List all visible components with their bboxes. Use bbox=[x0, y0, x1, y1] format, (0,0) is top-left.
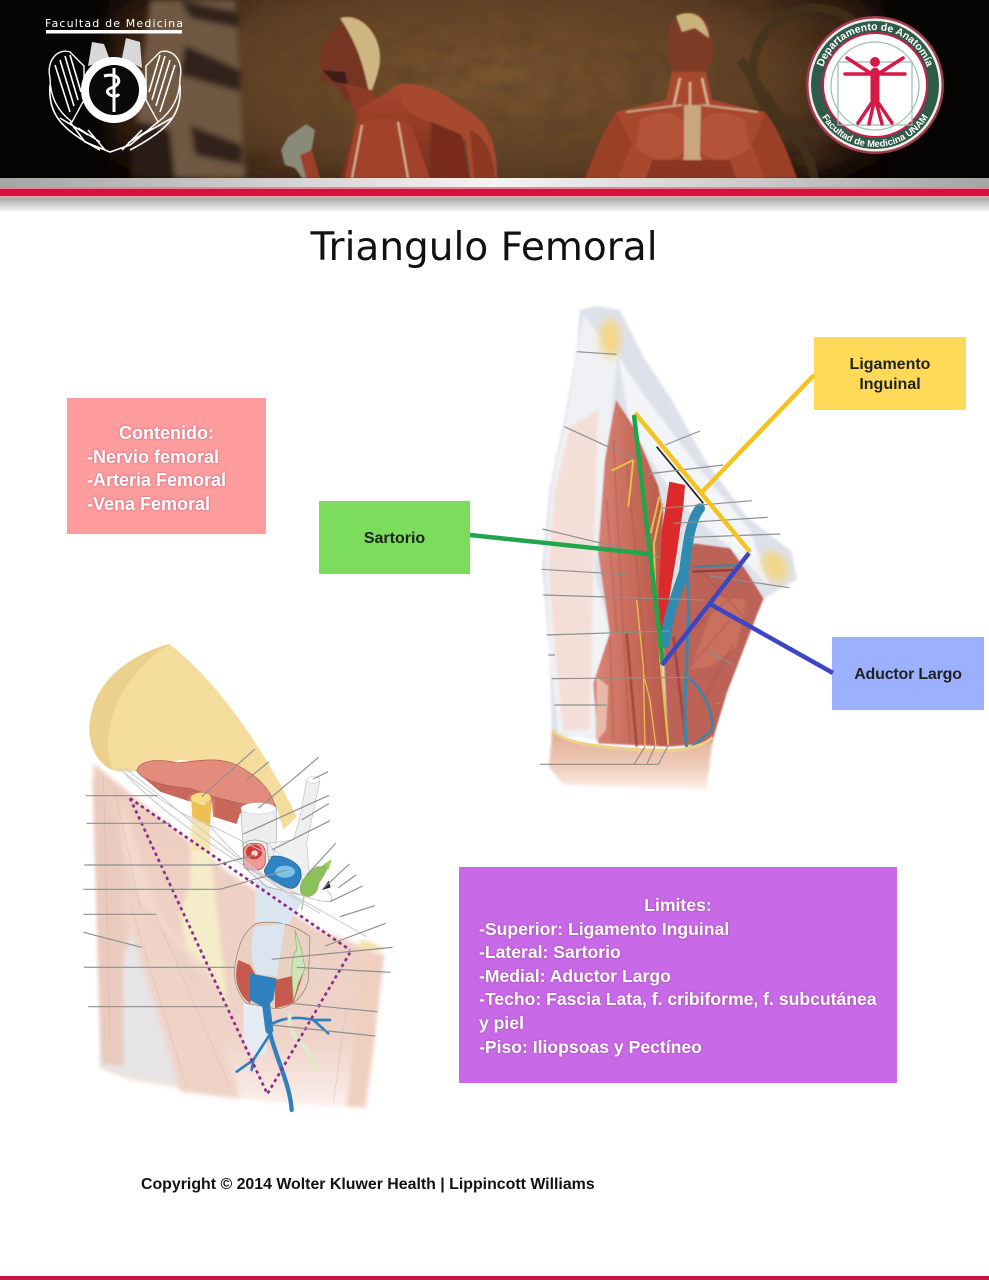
Facultad de Medicina logo bbox=[45, 17, 183, 152]
connector: aductor largo bbox=[662, 553, 833, 673]
Departamento de Anatomia seal: Facultad de Medicina UNAM bbox=[822, 114, 928, 148]
leg cuff bbox=[549, 730, 713, 790]
thigh skin background bbox=[93, 763, 384, 1108]
panel: limites: Limites: bbox=[644, 895, 712, 915]
iliopsoas muscle cross section bbox=[137, 760, 277, 824]
femoral artery bbox=[658, 482, 685, 633]
inguinal ligament bbox=[117, 767, 367, 937]
muscles of the thigh bbox=[593, 400, 763, 747]
panel: contenido: -Arteria Femoral bbox=[87, 470, 226, 490]
UNAM crest bbox=[49, 51, 181, 152]
white femoral sheath and iliac vessels bbox=[241, 777, 320, 1057]
Vitruvian man icon bbox=[831, 42, 919, 130]
great saphenous vein bbox=[237, 1002, 330, 1110]
panel: contenido bbox=[67, 398, 266, 534]
inguinal ligament shading bbox=[657, 447, 703, 503]
iliac bone bbox=[89, 644, 385, 951]
femoral vein section bbox=[264, 856, 301, 888]
femoral triangle dotted outline bbox=[130, 798, 350, 1094]
panel: aductor largo label: Aductor Largo bbox=[854, 666, 962, 683]
pointer lines bbox=[83, 749, 393, 1036]
panel: limites: -Superior: Ligamento Inguinal bbox=[479, 919, 729, 939]
panel: limites: -Medial: Aductor Largo bbox=[479, 966, 671, 986]
Facultad de Medicina logo: Facultad de Medicina bbox=[45, 17, 183, 30]
saphenous opening bbox=[235, 922, 310, 1009]
panel: aductor largo label bbox=[832, 637, 984, 710]
header banner bbox=[0, 0, 989, 212]
panel: limites bbox=[459, 867, 897, 1083]
femoral canal arrow bbox=[322, 881, 331, 890]
silver band bbox=[0, 178, 989, 187]
panel: ligamento inguinal label bbox=[814, 337, 966, 410]
bottom red rule bbox=[0, 1276, 989, 1280]
femoral nerve bbox=[180, 793, 228, 1010]
femoral artery section bbox=[243, 843, 265, 870]
lymph node bbox=[300, 860, 332, 910]
red band bbox=[0, 187, 989, 198]
panel: contenido: -Nervio femoral bbox=[87, 447, 219, 467]
gear and helix illustration bbox=[736, 4, 856, 178]
banner background bbox=[0, 0, 989, 178]
connector: ligamento inguinal bbox=[635, 375, 814, 552]
anatomical diagram: thigh dissection bbox=[540, 306, 797, 790]
lymph vessel lower bbox=[289, 1013, 317, 1072]
panel: limites: y piel bbox=[479, 1013, 524, 1033]
Departamento de Anatomia seal: Departamento de Anatomía bbox=[816, 23, 932, 68]
runner anatomical figure bbox=[281, 16, 497, 178]
fascia lata white layer bbox=[542, 306, 797, 740]
frontal anatomical figure bbox=[585, 13, 797, 178]
spine illustration bbox=[130, 0, 245, 178]
copyright: Copyright © 2014 Wolter Kluwer Health | Lippincott Williams bbox=[141, 1176, 595, 1193]
anatomical diagram: femoral sheath bbox=[83, 644, 393, 1112]
panel: ligamento inguinal label: Inguinal bbox=[859, 376, 921, 393]
iliac spine highlights bbox=[599, 319, 793, 587]
connector: sartorio bbox=[470, 415, 663, 665]
Departamento de Anatomia seal bbox=[806, 16, 944, 154]
femoral nerve bbox=[612, 460, 668, 747]
panel: sartorio label bbox=[319, 501, 470, 574]
panel: contenido: Contenido: bbox=[119, 423, 214, 443]
panel: ligamento inguinal label: Ligamento bbox=[850, 356, 930, 373]
panel: limites: -Lateral: Sartorio bbox=[479, 942, 621, 962]
panel: sartorio label: Sartorio bbox=[364, 530, 425, 547]
band shadow bbox=[0, 198, 989, 213]
pointer lines bbox=[540, 352, 789, 764]
panel: limites: -Techo: Fascia Lata, f. cribiforme, f. subcutánea bbox=[479, 989, 877, 1009]
panel: contenido: -Vena Femoral bbox=[87, 494, 210, 514]
panel: limites: -Piso: Iliopsoas y Pectíneo bbox=[479, 1037, 702, 1057]
title: Triangulo Femoral bbox=[310, 225, 658, 270]
femoral vein bbox=[665, 508, 737, 748]
